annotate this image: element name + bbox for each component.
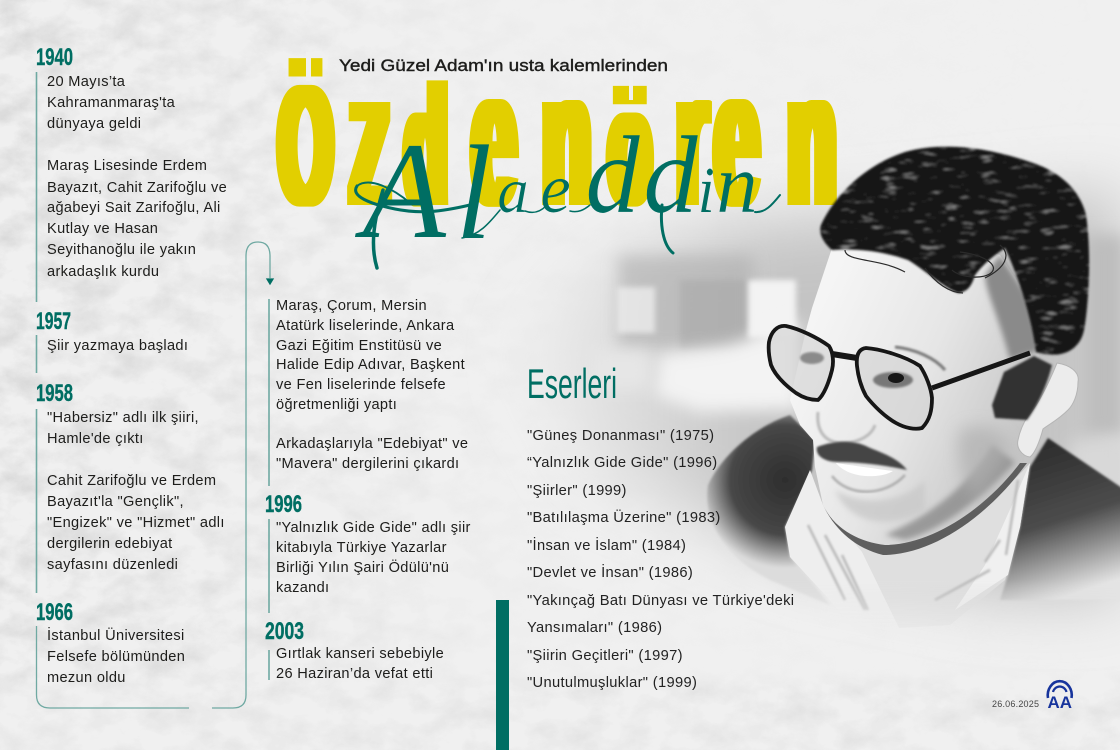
1940 entry: Kutlay ve Hasan	[47, 221, 158, 237]
smile	[836, 463, 893, 476]
script name: Alaeddin: i	[697, 154, 715, 227]
works list: "Unutulmuşluklar" (1999)	[527, 675, 697, 691]
ear	[1018, 363, 1078, 457]
teaching entry: öğretmenliği yaptı	[276, 397, 397, 413]
works list: "Şiirin Geçitleri" (1997)	[527, 648, 683, 664]
works list: "Batılılaşma Üzerine" (1983)	[527, 508, 721, 526]
works list: "Güneş Donanması" (1975)	[527, 428, 714, 444]
1996 entry: 1996	[265, 491, 302, 518]
script name: Alaeddin: a	[497, 155, 529, 226]
teaching entry: ve Fen liselerinde felsefe	[276, 377, 446, 393]
works heading: Eserleri	[527, 360, 617, 407]
date: 26.06.2025	[992, 699, 1039, 709]
1996 entry	[265, 491, 471, 596]
title surname: Özdenören: n	[543, 30, 590, 247]
nose	[818, 412, 875, 443]
1958 entry: "Habersiz" adlı ilk şiiri,	[47, 410, 199, 426]
works list	[527, 428, 794, 691]
1966 entry: İstanbul Üniversitesi	[47, 626, 185, 644]
title surname: Özdenören: e	[715, 26, 759, 247]
1940 entry: Kahramanmaraş'ta	[47, 95, 176, 111]
teal bar	[496, 600, 509, 750]
1958 entry: Bayazıt'la "Gençlik",	[47, 494, 184, 510]
1958 entry: dergilerin edebiyat	[47, 536, 173, 552]
jacket left	[707, 415, 830, 605]
moustache	[817, 442, 907, 470]
subtitle: Yedi Güzel Adam'ın usta kalemlerinden	[339, 56, 668, 75]
1957 entry: 1957	[36, 308, 71, 335]
title surname: Özdenören: Ö	[279, 49, 332, 242]
1966 entry: mezun oldu	[47, 670, 126, 686]
works list: “Yalnızlık Gide Gide" (1996)	[527, 455, 718, 471]
icon: AA logo: AA	[1048, 693, 1072, 712]
1957 entry: Şiir yazmaya başladı	[47, 338, 188, 354]
jaw shadow	[823, 426, 1027, 555]
title surname: Özdenören: e	[472, 26, 516, 247]
teaching entry: Gazi Eğitim Enstitüsü ve	[276, 338, 442, 354]
works list: "Şiirler" (1999)	[527, 483, 627, 499]
1996 entry: "Yalnızlık Gide Gide" adlı şiir	[276, 520, 471, 536]
1996 entry: Birliği Yılın Şairi Ödülü'nü	[276, 558, 449, 576]
script name: Alaeddin	[354, 114, 780, 268]
teaching entry: Arkadaşlarıyla "Edebiyat" ve	[276, 436, 468, 452]
face	[790, 240, 1040, 554]
photo backdrop	[530, 190, 1120, 600]
jacket right	[1000, 438, 1120, 600]
portrait photo	[707, 147, 1120, 630]
script name: Alaeddin: e	[540, 151, 571, 228]
1958 entry: Hamle'de çıktı	[47, 431, 144, 447]
1996 entry: kazandı	[276, 580, 329, 596]
1957 entry	[36, 308, 188, 354]
works list: Yansımaları" (1986)	[527, 620, 662, 636]
teaching entry	[276, 298, 468, 472]
1966 entry: 1966	[36, 599, 73, 626]
timeline lines	[36, 72, 269, 680]
script name: Alaeddin: A	[354, 114, 447, 267]
script name: Alaeddin: d	[643, 114, 699, 236]
neck	[854, 463, 1030, 590]
1940 entry: dünyaya geldi	[47, 116, 141, 132]
works list: "Yakınçağ Batı Dünyası ve Türkiye'deki	[527, 593, 794, 609]
teaching entry: Halide Edip Adıvar, Başkent	[276, 357, 465, 373]
1966 entry: Felsefe bölümünden	[47, 649, 185, 665]
teaching entry: Atatürk liselerinde, Ankara	[276, 318, 455, 334]
title surname: Özdenören	[279, 26, 836, 247]
1940 entry: 1940	[36, 44, 73, 71]
script name: Alaeddin: n	[716, 138, 758, 231]
title surname: Özdenören: n	[788, 30, 836, 247]
title surname: Özdenören: z	[350, 30, 389, 247]
1958 entry	[36, 380, 225, 573]
2003 entry: Gırtlak kanseri sebebiyle	[276, 646, 444, 662]
temple hair shade	[985, 255, 1040, 360]
hair	[820, 147, 1089, 355]
eyes and brow	[800, 347, 945, 388]
title surname: Özdenören: r	[677, 30, 707, 247]
2003 entry: 26 Haziran’da vefat etti	[276, 666, 433, 682]
1940 entry	[36, 44, 227, 280]
sideburn	[992, 356, 1052, 420]
glasses	[769, 326, 1030, 429]
title surname: Özdenören: ö	[609, 49, 651, 242]
2003 entry	[265, 618, 444, 682]
1966 entry	[36, 599, 185, 686]
1996 entry: kitabıyla Türkiye Yazarlar	[276, 540, 447, 556]
teaching entry: "Mavera" dergilerini çıkardı	[276, 456, 459, 472]
1940 entry: Seyithanoğlu ile yakın	[47, 242, 196, 258]
script name: Alaeddin: d	[585, 114, 641, 236]
loose curls	[845, 245, 1006, 293]
1958 entry: sayfasını düzenledi	[47, 557, 178, 573]
script name: Alaeddin: l	[455, 119, 493, 268]
1940 entry: Maraş Lisesinde Erdem	[47, 158, 207, 174]
teaching entry: Maraş, Çorum, Mersin	[276, 298, 427, 314]
works list: "İnsan ve İslam" (1984)	[527, 536, 686, 554]
timeline connector	[36, 242, 273, 708]
1958 entry: 1958	[36, 380, 73, 407]
shirt	[785, 464, 1030, 612]
1958 entry: "Engizek" ve "Hizmet" adlı	[47, 515, 225, 531]
flourish strokes	[356, 183, 780, 268]
works list: "Devlet ve İnsan" (1986)	[527, 563, 693, 581]
1940 entry: 20 Mayıs’ta	[47, 74, 126, 90]
2003 entry: 2003	[265, 618, 304, 645]
1958 entry: Cahit Zarifoğlu ve Erdem	[47, 473, 216, 489]
title surname: Özdenören: d	[405, 49, 447, 242]
1940 entry: arkadaşlık kurdu	[47, 264, 159, 280]
1940 entry: Bayazıt, Cahit Zarifoğlu ve	[47, 180, 227, 196]
icon: AA logo	[1048, 681, 1072, 712]
1940 entry: ağabeyi Sait Zarifoğlu, Ali	[47, 200, 221, 216]
